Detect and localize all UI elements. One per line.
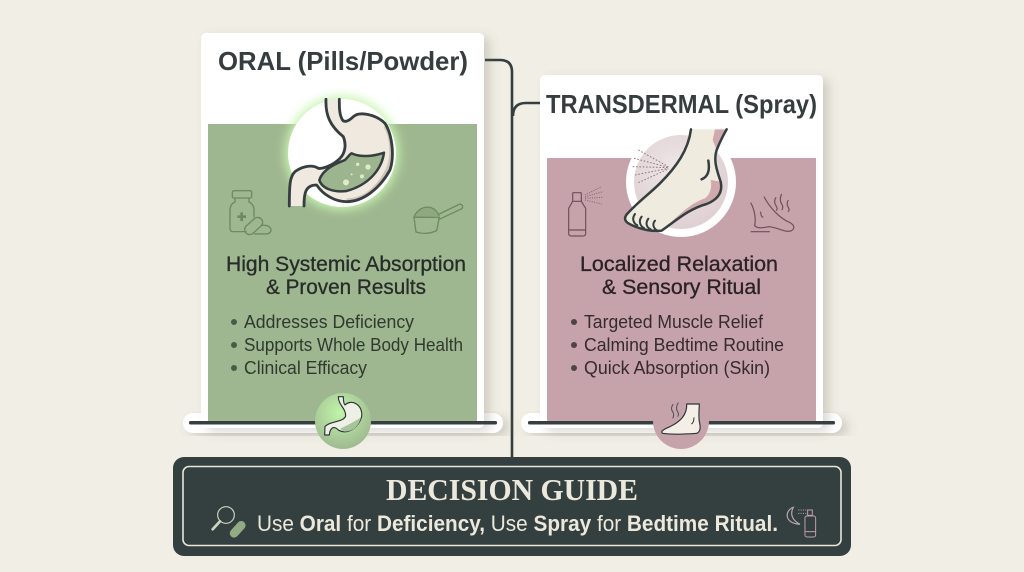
icon: transdermal badge foot [653, 403, 709, 449]
transdermal card [540, 75, 823, 428]
transdermal base bar [521, 413, 842, 433]
decision box [173, 457, 851, 556]
icon: powder scoop [414, 204, 463, 233]
transdermal bullet list: Calming Bedtime Routine [584, 335, 784, 355]
oral bullet list: Addresses Deficiency [244, 312, 414, 332]
icon: relaxed foot with steam [751, 194, 794, 232]
icon: stomach in glowing circle [285, 96, 399, 210]
oral bullet list: Supports Whole Body Health [244, 335, 463, 355]
transdermal heading: TRANSDERMAL (Spray) [546, 89, 817, 119]
oral base bar [183, 413, 503, 433]
oral subheading: & Proven Results [266, 276, 426, 299]
decision heading: DECISION GUIDE [386, 472, 638, 507]
decision box inner border [183, 466, 841, 546]
transdermal bullet list: Targeted Muscle Relief [584, 312, 764, 332]
icon: spray bottle [569, 187, 603, 236]
icon: foot being sprayed [625, 127, 736, 237]
oral card [201, 33, 484, 428]
icon: pill bottle [230, 191, 271, 237]
transdermal bullet list: Quick Absorption (Skin) [584, 358, 770, 378]
oral subheading: High Systemic Absorption [226, 253, 466, 276]
transdermal bullet list [571, 312, 784, 378]
connector lines [485, 60, 540, 458]
transdermal subheading: Localized Relaxation [580, 253, 778, 276]
panel: decision guide [173, 457, 851, 556]
transdermal base line [528, 421, 835, 424]
icon: magnifier and capsule [213, 507, 247, 539]
icon: moon and spray [787, 507, 816, 537]
panel: oral [183, 33, 503, 449]
transdermal subheading [580, 253, 778, 299]
oral bullet list [231, 312, 463, 378]
transdermal subheading: & Sensory Ritual [602, 276, 761, 299]
transdermal pink panel [547, 158, 816, 422]
oral subheading [226, 253, 466, 299]
oral green panel [208, 124, 477, 422]
icon: oral badge stomach [315, 393, 371, 449]
oral base line [189, 421, 497, 424]
decision guidance text: Use Oral for Deficiency, Use Spray for Bedtime Ritual. [257, 511, 778, 536]
oral bullet list: Clinical Efficacy [244, 358, 367, 378]
oral heading: ORAL (Pills/Powder) [218, 46, 468, 76]
panel: transdermal [521, 75, 842, 449]
